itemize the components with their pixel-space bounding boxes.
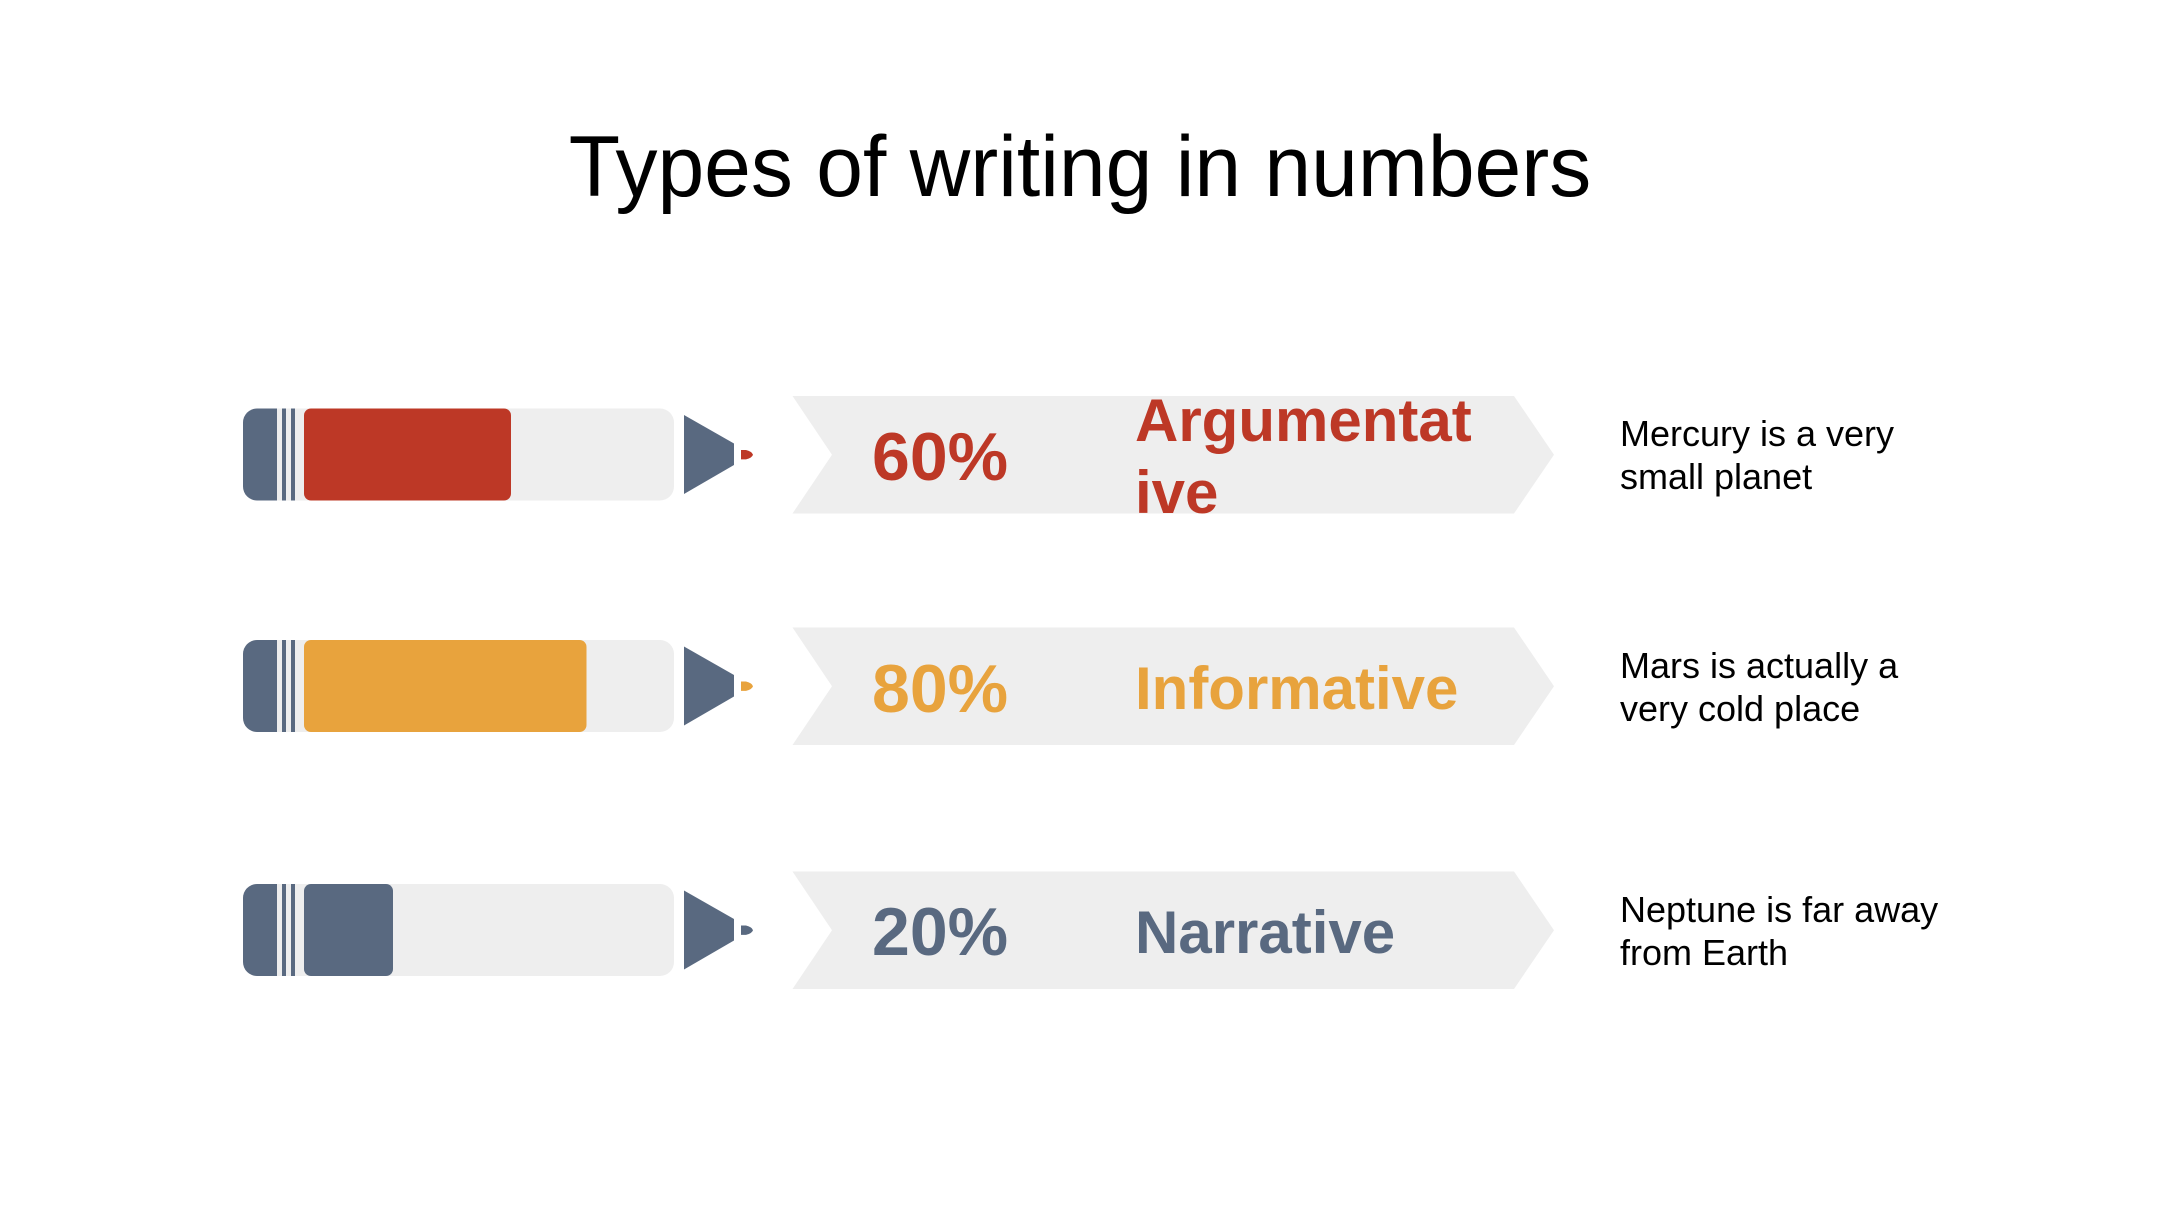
description: Neptune: from Earth [1620,932,1788,973]
description: Neptune: Neptune is far away [1620,889,1938,930]
description: Mars [1620,645,1898,729]
chevron: narrative [792,872,1554,989]
description: Mercury: small planet [1620,456,1812,497]
label: Informative: Informative [1135,655,1458,722]
label: Argumentative: Argumentat [1135,387,1472,454]
label: Argumentative: ive [1135,459,1218,526]
description: Neptune [1620,889,1938,973]
description: Mars: very cold place [1620,688,1860,729]
title: Types of writing in numbers [569,118,1591,215]
chevron: argumentative [792,396,1554,514]
label: Argumentative [1135,387,1472,526]
pencil: narrative 20% [243,884,753,976]
percentage: 80%: 80% [872,650,1008,726]
pencil: argumentative 60% [243,408,753,500]
pencil: informative 80% [243,640,753,732]
chevron: informative [792,628,1554,745]
percentage: 60%: 60% [872,419,1008,495]
description: Mercury [1620,413,1894,497]
label: Narrative: Narrative [1135,898,1395,966]
description: Mars: Mars is actually a [1620,645,1898,686]
description: Mercury: Mercury is a very [1620,413,1894,454]
percentage: 20%: 20% [872,894,1008,970]
